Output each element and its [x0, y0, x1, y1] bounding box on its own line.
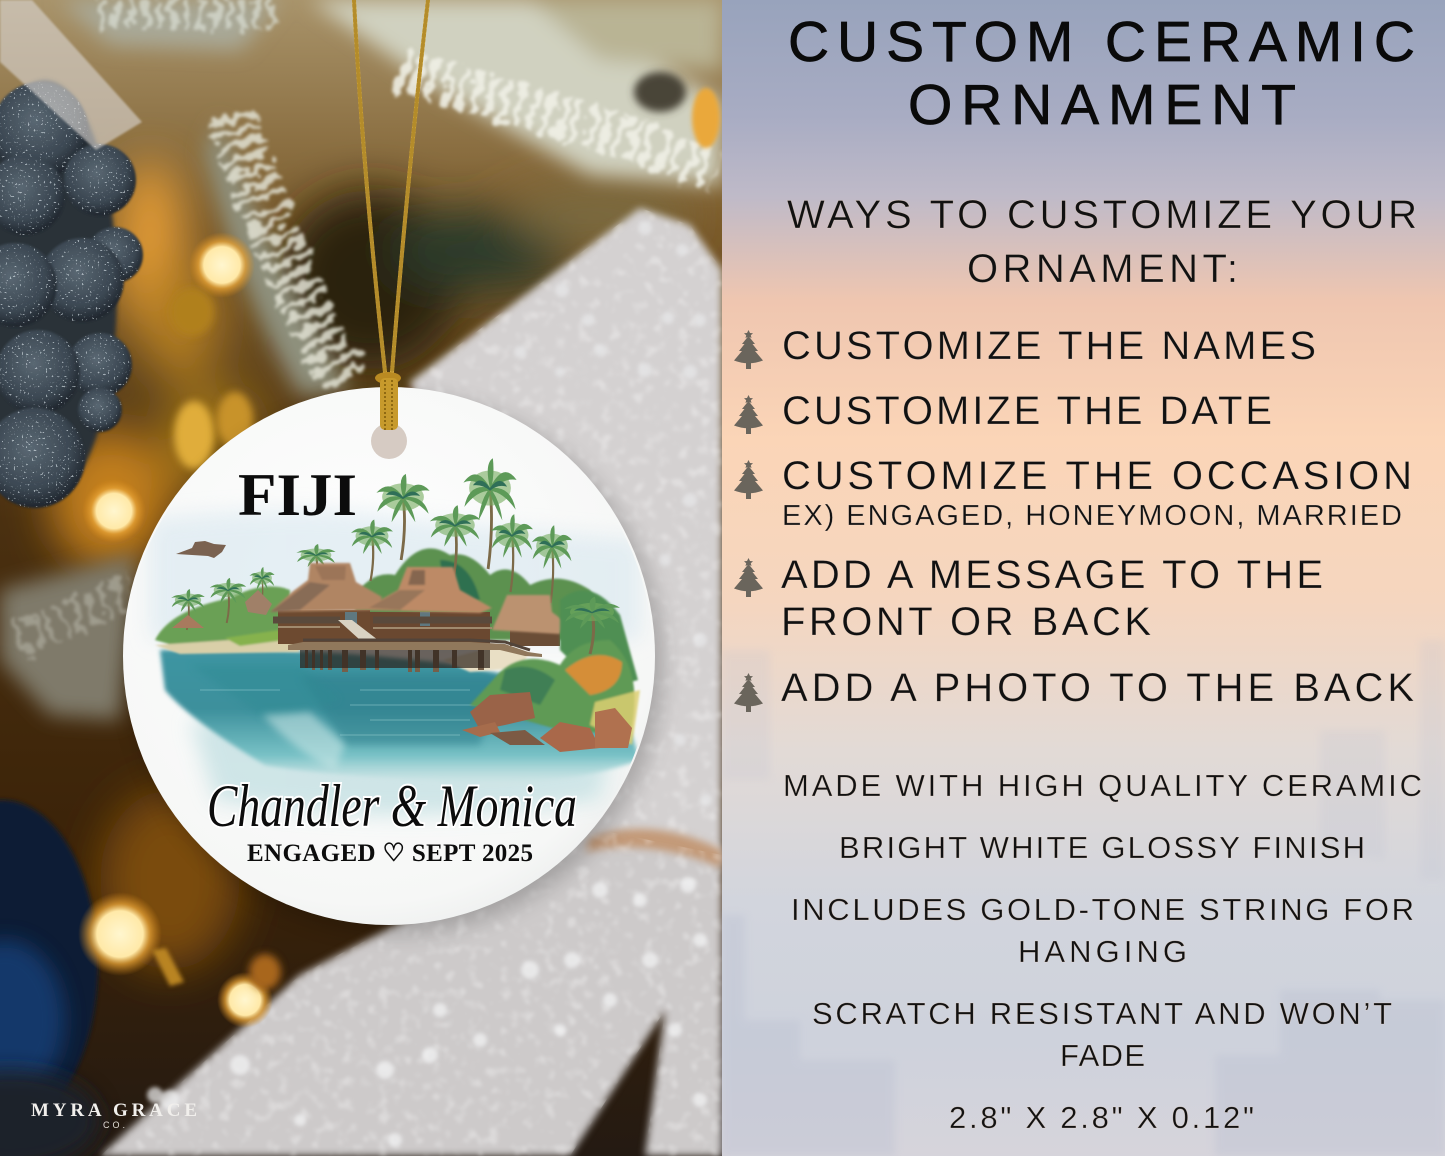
- stilts: [305, 650, 484, 672]
- sky wash: [150, 510, 640, 640]
- feature: ceramic: MADE WITH HIGH QUALITY CERAMIC: [783, 768, 1422, 803]
- lower glitter ribbon: [100, 820, 722, 1156]
- occasion and date: ENGAGED ♡ SEPT 2025: [247, 840, 533, 867]
- customization list: [734, 324, 1414, 712]
- balcony rails: [273, 620, 492, 628]
- feature: string: HANGING: [1018, 934, 1187, 969]
- icon: tree bullet 3: [734, 460, 763, 499]
- staircase: [338, 620, 376, 638]
- thatched roofs: [270, 563, 565, 634]
- warm golden glow: [50, 160, 690, 970]
- small left huts: [172, 615, 204, 628]
- dark pine-cone and amber light: [634, 72, 686, 112]
- option: message: [781, 553, 1323, 644]
- right foliage: [470, 590, 640, 745]
- gold hanging string: [354, 0, 428, 372]
- upper glitter ribbon: [400, 200, 722, 860]
- string knot: [375, 372, 401, 430]
- water reflections: [200, 690, 480, 735]
- icon: tree bullet 4: [734, 558, 763, 597]
- feature: durability: [812, 996, 1392, 1073]
- customize heading: [787, 193, 1417, 291]
- customize heading: ORNAMENT:: [967, 247, 1238, 291]
- option: message: FRONT OR BACK: [781, 600, 1151, 644]
- hut walls: [278, 610, 560, 646]
- ceramic ornament disc: [123, 372, 664, 934]
- logo: Myra Grace Co.: MYRA GRACE: [31, 1100, 197, 1121]
- option: names: CUSTOMIZE THE NAMES: [782, 324, 1316, 368]
- option: date: CUSTOMIZE THE DATE: [782, 389, 1272, 433]
- title: ORNAMENT: [908, 73, 1296, 137]
- feature: durability: SCRATCH RESISTANT AND WON’T: [812, 996, 1392, 1031]
- navy glitter bauble: [0, 800, 100, 1156]
- ornament hole: [371, 423, 407, 459]
- icon: tree bullet 1: [734, 330, 763, 369]
- panel: product details: [722, 0, 1445, 1156]
- organza ribbon: [0, 0, 142, 150]
- occasion examples: EX) ENGAGED, HONEYMOON, MARRIED: [782, 500, 1402, 532]
- logo: Myra Grace Co.: CO.: [103, 1120, 125, 1130]
- product features: [783, 768, 1422, 1135]
- feature: size: 2.8" X 2.8" X 0.12": [949, 1100, 1254, 1135]
- feature: finish: BRIGHT WHITE GLOSSY FINISH: [839, 830, 1365, 865]
- frosted needles: [20, 14, 715, 640]
- option: photo: ADD A PHOTO TO THE BACK: [781, 666, 1414, 710]
- palm trees: [171, 458, 572, 630]
- feature: durability: FADE: [1060, 1038, 1145, 1073]
- option: message: ADD A MESSAGE TO THE: [781, 553, 1323, 597]
- icon: tree bullet 2: [734, 395, 763, 434]
- FIJI heading: FIJI: [238, 462, 357, 528]
- water: [160, 649, 640, 782]
- title: [788, 10, 1415, 137]
- customize heading: WAYS TO CUSTOMIZE YOUR: [787, 193, 1417, 237]
- watercolor tropical scene: [150, 458, 640, 815]
- pale water wash under names: [190, 720, 620, 815]
- silver glitter bauble cluster: [0, 50, 143, 515]
- couple names: Chandler & Monica: [207, 773, 577, 839]
- faint city skyline: [722, 640, 1445, 1156]
- small distant island: [176, 541, 226, 558]
- photo background: christmas tree with glitter ribbon: [0, 0, 722, 1156]
- title: CUSTOM CERAMIC: [788, 10, 1415, 74]
- background foliage: [155, 548, 620, 654]
- lower boardwalk: [288, 640, 542, 657]
- frosted fir branches: [0, 0, 722, 720]
- bokeh lights: [78, 232, 281, 1028]
- beach under huts: [443, 645, 530, 672]
- icon: tree bullet 5: [734, 673, 763, 712]
- feature: string: INCLUDES GOLD-TONE STRING FOR: [791, 892, 1414, 927]
- feature: string: [791, 892, 1414, 969]
- option: occasion: CUSTOMIZE THE OCCASION: [782, 454, 1412, 498]
- rocks: [462, 692, 632, 752]
